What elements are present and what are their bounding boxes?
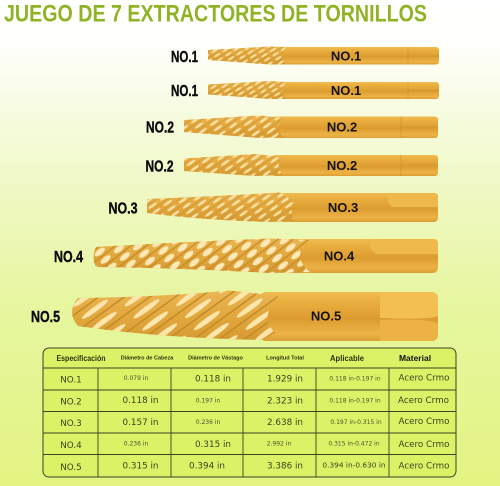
row NO.5: NO.5 [60, 463, 82, 473]
row NO.1: 1.929 in [267, 374, 303, 384]
table header: Aplicable [330, 354, 365, 363]
hex flat NO.3 [388, 193, 438, 207]
row NO.1: 0.118 in-0.197 in [329, 376, 381, 382]
label: NO.1 second: NO.1 [171, 83, 198, 100]
specification table [43, 348, 456, 477]
label: NO.1 first: NO.1 [171, 49, 198, 66]
extractor NO.2 first [146, 116, 438, 138]
row NO.1 [60, 374, 450, 386]
row NO.5: 3.386 in [267, 462, 303, 472]
hex line NO.2 first [401, 116, 438, 138]
row NO.4 [60, 440, 450, 451]
extractor NO.4 [54, 238, 438, 273]
hex line NO.1 second [408, 82, 439, 99]
row NO.2: 0.118 in [122, 396, 158, 406]
row NO.2: 0.118 in-0.197 in [329, 398, 381, 404]
flutes NO.3 [147, 192, 295, 222]
row NO.2: 0.197 in [196, 398, 220, 404]
text: NO.2 on shank: NO.2 [327, 120, 357, 134]
row NO.3 [60, 417, 450, 429]
row NO.1: 0.079 in [124, 375, 148, 382]
hex line NO.2 second [401, 155, 438, 176]
text: NO.2 on shank second: NO.2 [327, 158, 357, 173]
hex flat NO.4 [370, 239, 438, 254]
shank NO.4 [285, 239, 438, 273]
row NO.3: 2.638 in [267, 418, 303, 428]
row NO.3: Acero Crmo [398, 417, 450, 427]
shank NO.1 first [280, 47, 439, 64]
row NO.5: 0.394 in [189, 462, 225, 472]
shank NO.2 first [272, 116, 438, 138]
table header: Especificación [56, 354, 106, 363]
label: NO.5: NO.5 [31, 309, 60, 326]
row NO.5 [60, 460, 450, 473]
row NO.3: NO.3 [60, 419, 82, 429]
flutes NO.2 second [184, 154, 283, 176]
row NO.4: 0.236 in [124, 440, 148, 448]
row NO.2: Acero Crmo [398, 396, 449, 406]
hex line NO.1 first [408, 47, 439, 64]
row NO.4: NO.4 [60, 441, 82, 451]
row NO.3: 0.157 in [122, 418, 158, 428]
row NO.2 [60, 396, 449, 408]
label: NO.4: NO.4 [54, 249, 83, 266]
text: NO.1 on shank second: NO.1 [331, 83, 361, 98]
row NO.4: Acero Crmo [398, 440, 450, 450]
flutes NO.1 second [208, 81, 286, 99]
row NO.5: Acero Crmo [398, 462, 450, 472]
hex flat NO.5 [380, 292, 438, 319]
text: NO.3 on shank: NO.3 [328, 200, 358, 215]
row NO.2: 2.323 in [267, 396, 303, 406]
row NO.5: 0.315 in [122, 462, 158, 472]
shank NO.2 second [272, 155, 438, 176]
label: NO.2 second: NO.2 [146, 158, 174, 176]
row NO.4: 0.315 in-0.472 in [328, 440, 380, 448]
row NO.4: 0.315 in [195, 440, 231, 450]
table header: Material [399, 353, 431, 363]
table header: Diámetro de Vástago [188, 356, 243, 362]
shank NO.1 second [280, 82, 439, 99]
extractor NO.1 first [171, 46, 439, 66]
flutes NO.1 first [208, 46, 286, 64]
text: NO.4 on shank: NO.4 [324, 248, 355, 264]
row NO.4: 2.992 in [267, 440, 291, 448]
extractor NO.5 [31, 290, 438, 341]
extractor NO.1 second [171, 81, 439, 100]
row NO.1: NO.1 [60, 376, 82, 386]
text: NO.5 on shank: NO.5 [311, 308, 341, 324]
flutes NO.4 [94, 238, 310, 273]
row NO.2: NO.2 [60, 398, 82, 408]
row NO.3: 0.236 in [196, 419, 220, 426]
row NO.5: 0.394 in-0.630 in [322, 460, 386, 470]
label: NO.3: NO.3 [108, 200, 138, 218]
row NO.1: 0.118 in [195, 374, 231, 384]
flutes NO.2 first [184, 116, 283, 138]
flutes NO.5 [72, 290, 278, 340]
extractor NO.2 second [146, 154, 438, 176]
table header [56, 353, 431, 363]
table frame [43, 348, 456, 477]
row NO.3: 0.197 in-0.315 in [330, 419, 382, 426]
shank NO.3 [280, 193, 438, 222]
shank NO.5 [260, 292, 438, 341]
table header: Diámetro de Cabeza [121, 356, 174, 362]
table header: Longitud Total [266, 356, 304, 362]
row NO.1: Acero Crmo [398, 374, 450, 384]
text: NO.1 on shank: NO.1 [331, 48, 361, 64]
extractor NO.3 [108, 192, 438, 222]
label: NO.2 first: NO.2 [146, 120, 174, 136]
